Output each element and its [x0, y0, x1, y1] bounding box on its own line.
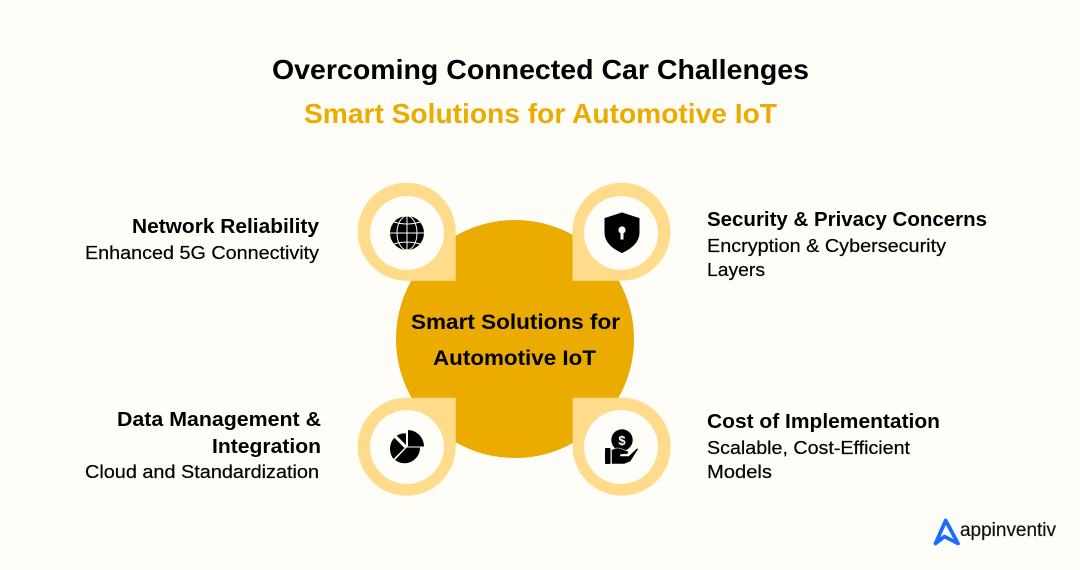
- label: security and privacy: Security & Privacy Concerns: [707, 209, 987, 231]
- pin: network reliability: [358, 183, 456, 281]
- icon: pie chart: [390, 430, 424, 463]
- label: cost of implementation: Scalable, Cost-Efficient: [707, 438, 910, 458]
- icon: hand holding coin: $: [618, 433, 626, 448]
- label: cost of implementation: Models: [707, 462, 772, 482]
- label: security and privacy: [707, 209, 987, 280]
- label: network reliability: [85, 216, 320, 263]
- label: cost of implementation: [707, 411, 940, 482]
- subtitle: Smart Solutions for Automotive IoT: [304, 98, 777, 129]
- label: cost of implementation: Cost of Implementation: [707, 411, 940, 433]
- label: network reliability: Enhanced 5G Connectivity: [85, 243, 319, 263]
- pin: security: [572, 183, 670, 281]
- icon: globe: [390, 216, 424, 250]
- label: security and privacy: Layers: [707, 260, 765, 280]
- central circle: Automotive IoT: [433, 347, 596, 370]
- title: Overcoming Connected Car Challenges: [272, 54, 809, 85]
- label: data management: [85, 409, 321, 482]
- label: network reliability: Network Reliability: [132, 216, 320, 238]
- label: security and privacy: Encryption & Cybersecurity: [707, 236, 946, 256]
- label: data management: Cloud and Standardization: [85, 462, 319, 482]
- icon: shield with keyhole: [605, 213, 639, 252]
- pin: cost: [573, 398, 671, 496]
- logo: appinventiv: appinventiv: [960, 520, 1056, 541]
- label: data management: Integration: [212, 436, 321, 458]
- central circle: [396, 220, 634, 458]
- central circle: Smart Solutions for: [411, 311, 620, 334]
- pin: data management: [358, 398, 456, 496]
- label: data management: Data Management &: [117, 409, 321, 431]
